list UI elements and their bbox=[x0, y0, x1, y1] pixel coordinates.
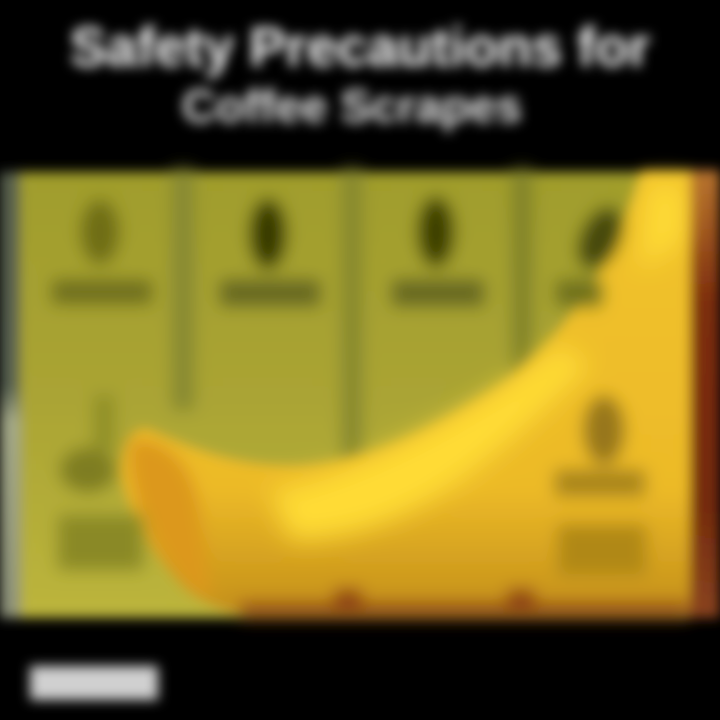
label: card 5 bbox=[58, 515, 143, 570]
label: card 4 bbox=[556, 280, 602, 306]
title: Safety Precautions for bbox=[70, 15, 650, 78]
label: card 6 bbox=[555, 470, 645, 496]
icon: card 3 bbox=[419, 198, 453, 266]
card 6 bbox=[555, 396, 646, 575]
icon top: card 5 bbox=[94, 395, 114, 450]
panel background bbox=[0, 170, 720, 618]
yellow curved shape bbox=[120, 170, 690, 612]
bright highlight band bbox=[270, 185, 682, 540]
card 1 bbox=[52, 200, 152, 304]
icon: card 2 bbox=[251, 200, 285, 268]
title bbox=[70, 15, 650, 132]
description: card 6 bbox=[558, 525, 646, 575]
label: card 3 bbox=[392, 280, 484, 306]
icon: card 6 bbox=[584, 396, 624, 464]
card 4 bbox=[556, 201, 630, 306]
bottom shadow bbox=[240, 590, 690, 618]
card 3 bbox=[392, 198, 484, 306]
icon: card 5 bbox=[60, 448, 116, 492]
card 2 bbox=[220, 200, 320, 306]
title: Coffee Scrapes bbox=[182, 80, 522, 132]
main panel bbox=[0, 170, 720, 618]
footer logo bbox=[30, 666, 158, 700]
card 5 bbox=[58, 395, 143, 570]
orange tip bbox=[129, 439, 212, 600]
label: card 2 bbox=[220, 280, 320, 306]
label: card 1 bbox=[52, 280, 152, 304]
icon: card 1 bbox=[81, 200, 119, 264]
column dividers bbox=[172, 170, 532, 470]
icon: card 4 bbox=[570, 201, 630, 275]
